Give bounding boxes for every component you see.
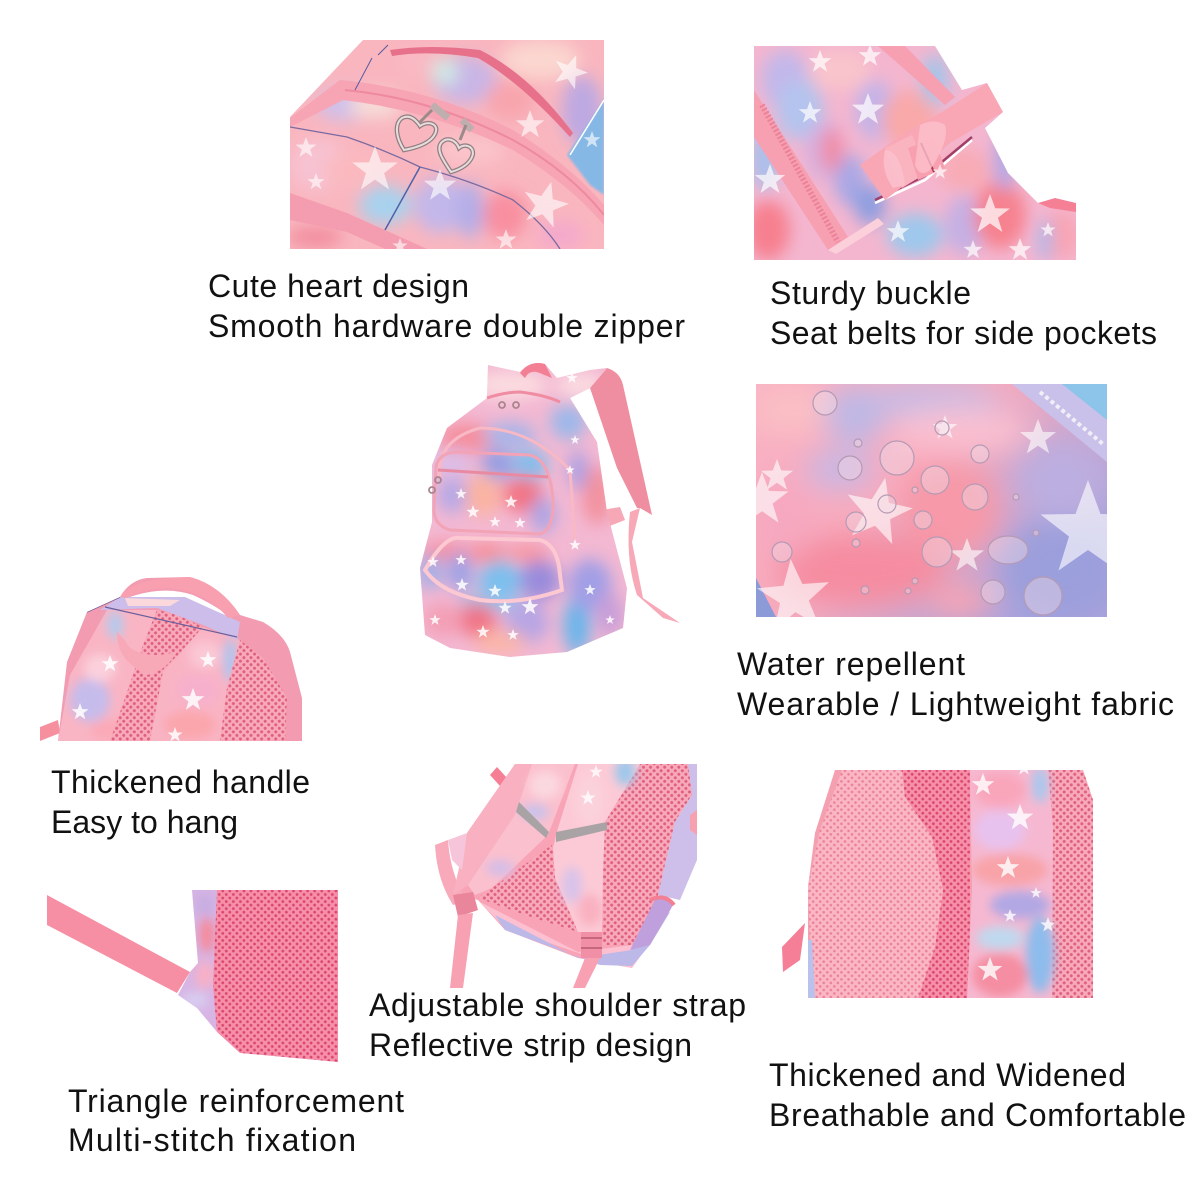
panel: full backpack [415, 360, 680, 660]
left strap [58, 610, 157, 741]
opening below the handle [130, 590, 226, 616]
icon: buckle strap [860, 83, 1003, 200]
lower zipper [290, 193, 427, 249]
right strap [150, 627, 240, 741]
panel: heart zipper photo [287, 40, 604, 252]
caption: handle: Easy to hang [51, 804, 238, 840]
handle [120, 577, 240, 618]
panel: thickened handle photo [40, 575, 303, 741]
base body [453, 764, 690, 968]
water drops [772, 391, 1062, 615]
handle edge [390, 47, 573, 137]
caption: padded strap [769, 1057, 1186, 1133]
zipper hearts [429, 402, 519, 493]
caption: water repellent [737, 646, 1174, 722]
top handle [520, 363, 552, 378]
caption: heart zipper: Smooth hardware double zipper [208, 308, 685, 344]
right mesh [1048, 770, 1095, 998]
caption: water repellent: Water repellent [737, 646, 965, 682]
right mesh [220, 640, 287, 741]
caption: handle: Thickened handle [51, 764, 310, 800]
panel: sturdy buckle photo [746, 44, 1080, 262]
buckles and lower straps [453, 892, 478, 917]
strap [47, 895, 190, 993]
panel: padded strap photo [782, 760, 1100, 998]
caption: padded strap: Thickened and Widened [769, 1057, 1126, 1093]
far right strip [658, 764, 697, 900]
caption: heart zipper: Cute heart design [208, 268, 469, 304]
caption: buckle [770, 275, 1157, 351]
caption: shoulder strap [369, 987, 746, 1063]
center mesh [110, 610, 203, 741]
caption: handle [51, 764, 310, 840]
left loop [435, 840, 456, 905]
panel: water repellent photo [756, 384, 1107, 617]
caption: buckle: Sturdy buckle [770, 275, 971, 311]
caption: heart zipper [208, 268, 685, 344]
caption: buckle: Seat belts for side pockets [770, 315, 1157, 351]
caption: triangle reinforcement: Triangle reinforcement [68, 1083, 404, 1119]
caption: triangle reinforcement [68, 1083, 404, 1158]
left tie-dye strap [468, 764, 575, 895]
bottom rim [480, 902, 673, 968]
zipper bands [754, 90, 848, 250]
right shoulder strap [590, 368, 652, 515]
zipper band [290, 80, 604, 225]
panel: adjustable straps back view [435, 758, 697, 988]
reflective strips [516, 802, 549, 838]
caption: padded strap: Breathable and Comfortable [769, 1097, 1186, 1133]
caption: shoulder strap: Adjustable shoulder strap [369, 987, 746, 1023]
dark center mesh [900, 770, 970, 998]
caption: triangle reinforcement: Multi-stitch fixation [68, 1122, 356, 1158]
loop [117, 632, 177, 675]
left pad [808, 770, 943, 998]
panel: triangle reinforcement photo [47, 890, 340, 1065]
right mesh [603, 764, 695, 945]
center mesh [478, 845, 578, 932]
caption: water repellent: Wearable / Lightweight fabric [737, 686, 1174, 722]
right tie-dye strap [553, 764, 640, 932]
plain side [456, 764, 532, 890]
caption: shoulder strap: Reflective strip design [369, 1027, 692, 1063]
strap [967, 770, 1053, 998]
side tabs [490, 767, 507, 786]
icon: heart zipper pulls [397, 105, 473, 172]
